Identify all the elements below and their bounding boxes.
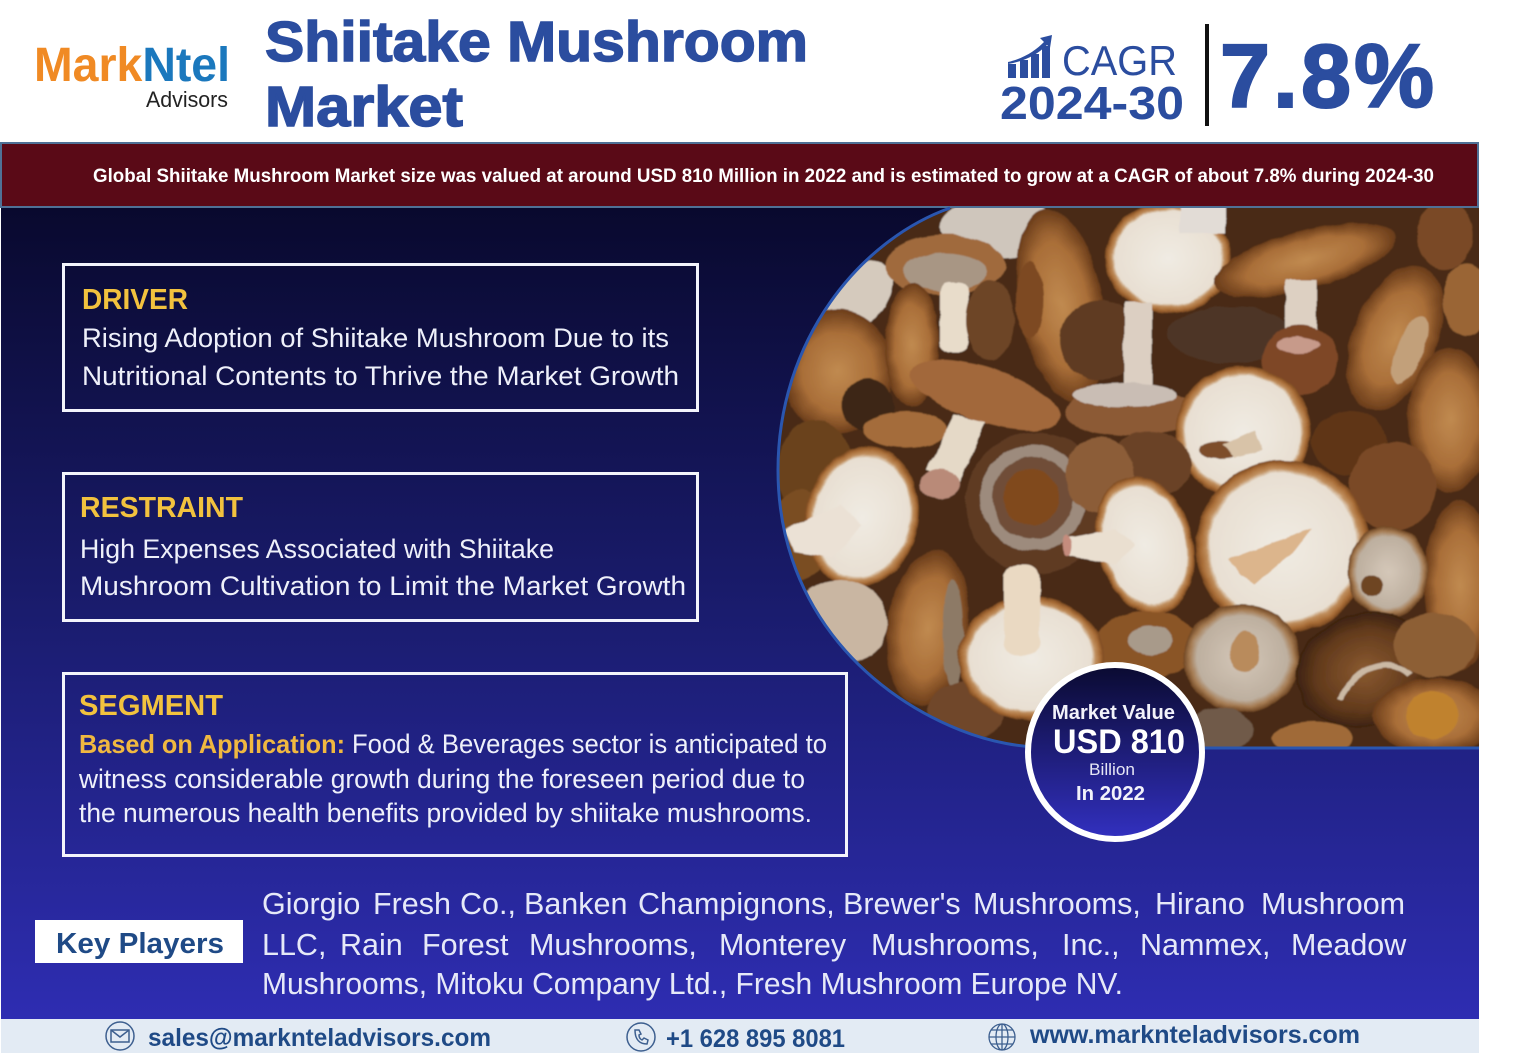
key players list: Mushroom (1261, 887, 1405, 921)
key players list: Mushrooms, (973, 887, 1141, 921)
logo: MarkNtel Advisors: Advisors (146, 87, 228, 112)
main gradient panel (1, 208, 1479, 1019)
key players label: Key Players (56, 928, 224, 960)
key players list: Mushrooms, Mitoku Company Ltd., Fresh Mushroom Europe NV. (262, 967, 1123, 1001)
key players list: Inc., (1062, 928, 1120, 962)
panel: driver: Nutritional Contents to Thrive the Market Growth (82, 361, 679, 391)
panel: segment: SEGMENT (79, 690, 223, 722)
panel: segment: witness considerable growth during the foreseen period due to (78, 764, 805, 794)
title: Shiitake Mushroom (265, 10, 808, 74)
panel: segment: Based on Application: (79, 729, 345, 759)
key players list: Rain (340, 928, 403, 962)
panel: segment: the numerous health benefits provided by shiitake mushrooms. (79, 798, 812, 828)
CAGR value: 7.8% (1220, 27, 1434, 127)
panel: segment: Food & Beverages sector is anticipated to (352, 729, 827, 759)
key players list (262, 887, 1407, 1001)
logo: MarkNtel Advisors: MarkNtel (34, 39, 230, 92)
key players list: Nammex, (1140, 928, 1270, 962)
callout: market value: Market Value (1052, 702, 1175, 724)
key players list: Hirano (1155, 887, 1245, 921)
panel: driver: Rising Adoption of Shiitake Mushroom Due to its (82, 323, 669, 353)
key players list: Monterey (719, 928, 847, 962)
icon: globe (989, 1024, 1015, 1050)
divider (1205, 24, 1209, 126)
panel: driver (64, 264, 698, 410)
photo: shiitake mushrooms (760, 195, 1497, 765)
CAGR block (1000, 35, 1184, 129)
contact: website: www.marknteladvisors.com (1029, 1021, 1360, 1049)
CAGR block: CAGR (1062, 37, 1177, 84)
key players list: Co., (460, 887, 516, 921)
panel: restraint: High Expenses Associated with Shiitake (80, 534, 554, 564)
key players list: Mushrooms, (871, 928, 1039, 962)
summary banner (1, 143, 1478, 207)
callout: market value (1028, 665, 1202, 839)
photo border (778, 208, 1479, 748)
key players list: Meadow (1291, 928, 1407, 962)
key players list: Brewer's (843, 887, 961, 921)
key players list: Fresh (373, 887, 451, 921)
key players list: Mushrooms, (529, 928, 697, 962)
icon: envelope (106, 1022, 134, 1050)
CAGR block: 2024-30 (1000, 77, 1184, 129)
callout: market value: USD 810 (1053, 723, 1185, 761)
icon: growth bars and arrow (1008, 35, 1052, 78)
key players list: LLC, (262, 928, 326, 962)
callout: market value: Billion (1089, 760, 1135, 779)
panel: restraint: RESTRAINT (80, 492, 243, 524)
contact: phone: +1 628 895 8081 (666, 1025, 845, 1053)
footer bar (1, 1019, 1479, 1053)
panel: segment (64, 674, 846, 856)
key players label (35, 920, 243, 963)
key players list: Champignons, (638, 887, 835, 921)
panel: restraint: Mushroom Cultivation to Limit the Market Growth (80, 571, 686, 601)
title (265, 10, 808, 139)
key players list: Giorgio (262, 887, 360, 921)
key players list: Forest (422, 928, 509, 962)
title: Market (265, 75, 463, 139)
contact: email: sales@marknteladvisors.com (148, 1024, 491, 1052)
key players list: Banken (524, 887, 627, 921)
panel: driver: DRIVER (82, 284, 188, 316)
panel: restraint (64, 474, 698, 620)
callout: market value: In 2022 (1076, 783, 1145, 805)
icon: phone (627, 1023, 655, 1051)
summary banner: Global Shiitake Mushroom Market size was valued at around USD 810 Million in 2022 and is estimated to grow at a CAGR of about 7.8% during 2024-30 (93, 165, 1434, 187)
